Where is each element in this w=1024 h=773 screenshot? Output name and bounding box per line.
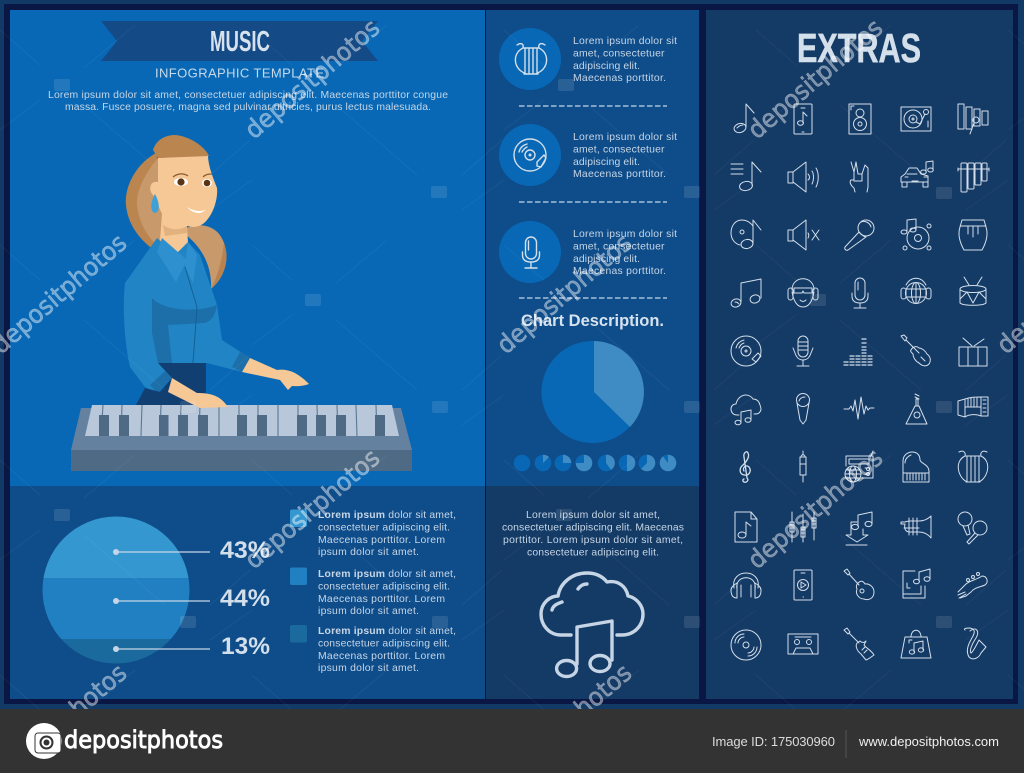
text: adipiscing elit. xyxy=(573,157,640,168)
icon: equalizer xyxy=(844,339,872,365)
watermark text: depositphotos xyxy=(742,13,888,145)
footer logo: depositphotos xyxy=(64,726,223,754)
icon grid xyxy=(730,104,989,660)
icon: electric guitar xyxy=(844,628,874,660)
divider dashed xyxy=(519,105,667,107)
text: adipiscing elit. xyxy=(573,254,640,265)
text: Lorem ipsum dolor sit xyxy=(573,132,677,143)
legend item 1 xyxy=(290,510,456,558)
icon: two notes xyxy=(730,279,761,308)
icon: grand piano xyxy=(903,452,929,482)
extras heading: EXTRAS xyxy=(797,25,921,71)
text xyxy=(573,36,677,84)
icon: music book xyxy=(903,569,930,598)
icon: speaker and note xyxy=(901,219,931,250)
footer logo xyxy=(26,723,223,759)
legend item 2 xyxy=(290,568,456,617)
legend item 3: Lorem ipsum dolor sit amet, xyxy=(318,626,456,637)
title ribbon xyxy=(101,21,378,61)
callout 43% xyxy=(113,537,270,564)
icon: treble clef xyxy=(740,452,750,482)
callout 44% xyxy=(113,585,270,612)
icon: speaker xyxy=(849,104,871,134)
legend item 1: ipsum dolor sit amet. xyxy=(318,547,419,558)
icon: guitar head xyxy=(958,572,987,598)
icon: marimba xyxy=(958,163,989,192)
icon: rock hand xyxy=(850,162,868,192)
icon: download music xyxy=(846,512,872,545)
callout 13% xyxy=(113,633,270,660)
description text: porttitor. Lorem ipsum dolor sit amet, xyxy=(503,535,683,546)
icon: saxophone xyxy=(965,628,986,659)
intro text: massa. Fusce posuere, magna sed pulvinar ultricies, purus lectus malesuada. xyxy=(65,102,431,113)
item 3 xyxy=(499,221,677,283)
item 2 xyxy=(499,124,677,186)
chart heading: Chart Description. xyxy=(521,312,664,330)
text: Maecenas porttitor. xyxy=(573,169,666,180)
legend item 2: Maecenas porttitor. Lorem xyxy=(318,594,445,605)
icon: balalaika xyxy=(906,394,927,424)
text: amet, consectetuer xyxy=(573,242,665,252)
watermark text: depositphotos xyxy=(491,228,637,360)
icon: music note xyxy=(733,104,754,134)
icon: tom drum xyxy=(959,338,987,366)
panel: extras xyxy=(706,10,1013,699)
icon: phone with note xyxy=(794,104,812,134)
icon: studio microphone xyxy=(852,278,868,308)
icon: drum xyxy=(960,277,986,305)
watermark cameras xyxy=(54,79,952,628)
icon: trumpet xyxy=(901,516,931,538)
subtitle: INFOGRAPHIC TEMPLATE xyxy=(155,66,324,80)
icon: speaker volume xyxy=(788,162,818,192)
icon: speaker mute xyxy=(788,220,819,250)
text: Maecenas porttitor. xyxy=(573,266,666,277)
icon: lyre xyxy=(515,44,547,74)
legend item 1: Lorem ipsum dolor sit amet, xyxy=(318,510,456,521)
icon: ball microphone xyxy=(796,394,810,424)
banded circle chart xyxy=(40,515,192,665)
item 1 xyxy=(499,28,677,90)
panel: hero with musician xyxy=(10,10,485,486)
panel: percentage breakdown xyxy=(10,486,485,699)
panel: cloud music xyxy=(486,486,699,699)
icon: retro microphone xyxy=(793,336,813,366)
text: Lorem ipsum dolor sit xyxy=(573,229,677,240)
icon: music file xyxy=(735,512,757,542)
image id: Image ID: 175030960 xyxy=(712,734,835,749)
icon: vinyl xyxy=(731,336,761,366)
text: adipiscing elit. xyxy=(573,61,640,72)
icon: turntable xyxy=(901,107,931,131)
icon: conga drum xyxy=(959,220,987,250)
intro text: Lorem ipsum dolor sit amet, consectetuer adipiscing elit. Maecenas porttitor congue xyxy=(48,90,448,101)
watermark text: depositphotos xyxy=(239,443,385,575)
icon: globe headphones xyxy=(901,278,931,304)
legend item 1: consectetuer adipiscing elit. xyxy=(318,522,450,534)
text xyxy=(573,229,677,277)
footer separator xyxy=(845,730,847,758)
icon: headphones xyxy=(731,573,761,598)
icon: cassette xyxy=(788,634,818,654)
callout 43%: 43% xyxy=(220,537,270,564)
description text xyxy=(502,510,684,558)
icon: violin xyxy=(901,335,930,366)
footer bar xyxy=(0,709,1024,773)
icon: phone play xyxy=(794,570,812,600)
icon: radio globe xyxy=(845,451,873,482)
divider dashed xyxy=(519,297,667,299)
intro text xyxy=(48,90,448,113)
legend item 3: Maecenas porttitor. Lorem xyxy=(318,651,445,662)
icon: music bag xyxy=(901,630,931,658)
description text: Lorem ipsum dolor sit amet, xyxy=(526,510,660,521)
icon: vinyl record xyxy=(514,139,546,171)
pie chart xyxy=(542,341,644,443)
legend item 1: Maecenas porttitor. Lorem xyxy=(318,535,445,546)
text: Maecenas porttitor. xyxy=(573,73,666,84)
icon: playlist note xyxy=(731,162,761,192)
icon: handheld microphone xyxy=(845,220,874,250)
icon: maracas xyxy=(958,512,987,544)
icon: xylophone xyxy=(958,104,988,134)
text: amet, consectetuer xyxy=(573,144,665,156)
watermark text: depositphotos xyxy=(742,443,888,575)
text xyxy=(573,132,677,180)
callout 13%: 13% xyxy=(221,633,270,660)
callout 44%: 44% xyxy=(220,585,270,612)
text: amet, consectetuer xyxy=(573,48,665,60)
watermark text: depositphotos xyxy=(239,13,385,145)
title: MUSIC xyxy=(210,26,270,58)
legend item 3 xyxy=(290,625,456,674)
legend item 2: Lorem ipsum dolor sit amet, xyxy=(318,569,456,580)
legend item 3: ipsum dolor sit amet. xyxy=(318,663,419,674)
text: Lorem ipsum dolor sit xyxy=(573,36,677,47)
legend item 2: consectetuer adipiscing elit. xyxy=(318,582,450,592)
legend item 3: consectetuer adipiscing elit. xyxy=(318,638,450,650)
icon: audio jack xyxy=(800,451,806,482)
icon: microphone xyxy=(522,237,540,268)
icon: cloud music xyxy=(731,395,761,425)
icon: headphones face xyxy=(788,279,818,307)
icon: mixer sliders xyxy=(790,512,816,542)
website: www.depositphotos.com xyxy=(858,734,999,749)
icon: accordion xyxy=(958,397,988,417)
icon: cloud with music notes xyxy=(541,573,643,676)
description text: consectetuer adipiscing elit. xyxy=(527,548,659,558)
icon: lyre xyxy=(958,451,988,482)
mini pie row xyxy=(514,455,676,471)
panel: feature list and chart xyxy=(486,10,699,486)
legend item 2: ipsum dolor sit amet. xyxy=(318,606,419,617)
icon: acoustic guitar xyxy=(844,569,874,600)
description text: consectetuer adipiscing elit. Maecenas xyxy=(502,522,684,534)
icon: car with note xyxy=(901,161,933,187)
icon: sound wave xyxy=(844,397,874,419)
illustration: woman playing keyboard xyxy=(71,135,412,471)
icon: record xyxy=(731,630,761,660)
icon: cd with note xyxy=(731,220,761,249)
divider dashed xyxy=(519,201,667,203)
